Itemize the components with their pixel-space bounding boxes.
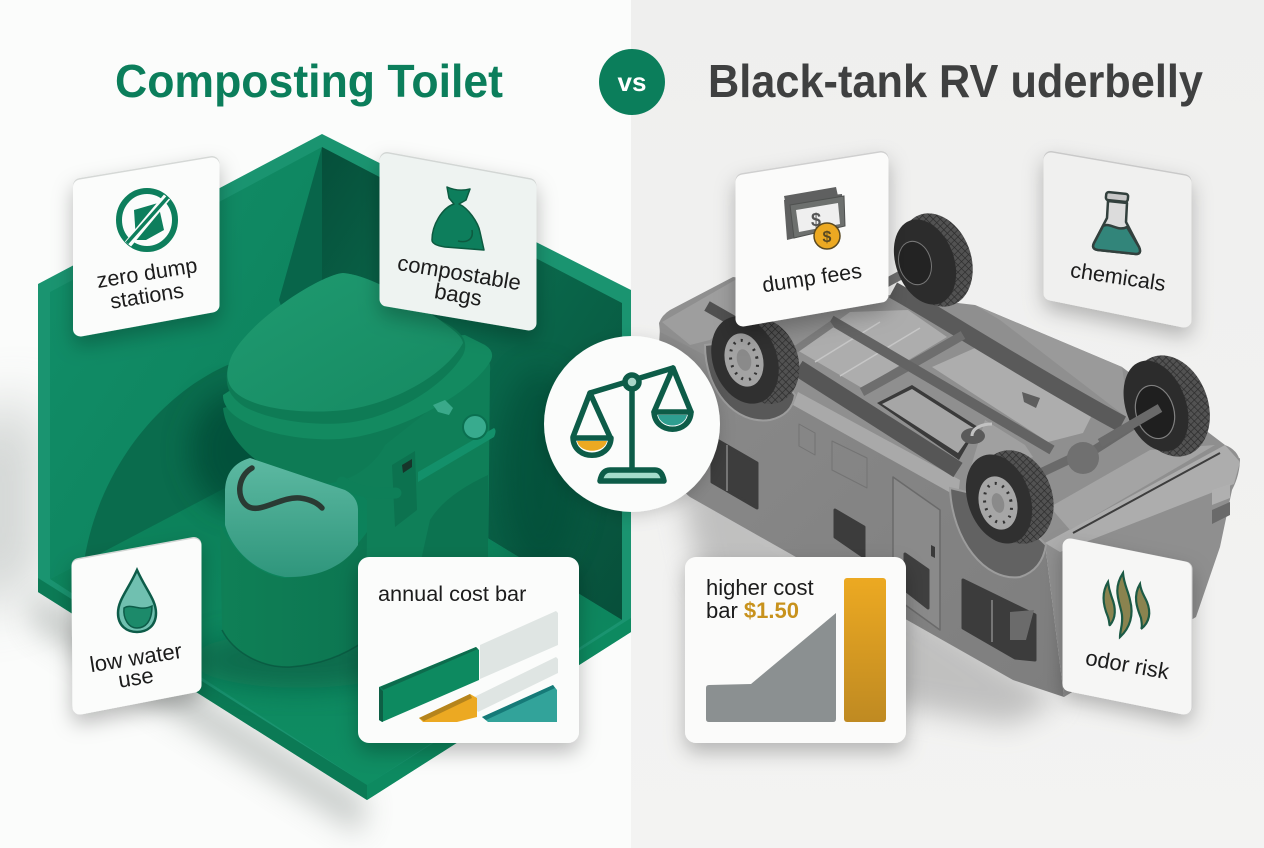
- chassis rails: [707, 262, 1157, 478]
- end wall: [1045, 458, 1240, 697]
- icon: odor waves: [1104, 573, 1149, 637]
- illustration: overturned RV underbelly: [659, 203, 1240, 697]
- icon: balance scale: [573, 368, 691, 481]
- icon: cash and coin: $: [823, 229, 832, 246]
- teal waste bucket: [225, 458, 358, 577]
- label: low water use: use: [116, 662, 155, 693]
- wheel front left: [700, 307, 811, 414]
- label: compostable bags: bags: [433, 278, 484, 311]
- wheel front right: [954, 440, 1066, 554]
- vs badge: vs: [618, 67, 646, 97]
- wheel rear inner: [883, 203, 985, 317]
- label: annual cost bar: annual cost bar: [378, 581, 526, 606]
- label: dump fees: dump fees: [761, 259, 863, 297]
- card: compostable bags: [387, 160, 529, 323]
- wheel arches: [950, 488, 1046, 577]
- toilet lid: [227, 273, 465, 424]
- chart: annual cost isometric bars: [379, 611, 558, 722]
- icon: water drop: [118, 570, 156, 632]
- card: annual cost bar: [358, 557, 579, 743]
- panel: left background: [0, 0, 632, 848]
- label: odor risk: odor risk: [1084, 645, 1172, 684]
- illustration: green composting toilet: [220, 273, 496, 667]
- card: dump fees: [743, 158, 881, 319]
- card: odor risk: [1070, 546, 1185, 707]
- card: zero dump stations: [80, 164, 212, 329]
- icon: cash and coin: [784, 187, 845, 249]
- toilet rim under lid: [223, 335, 492, 439]
- label: zero dump stations: [95, 253, 199, 314]
- title: Composting Toilet: Composting Toilet: [115, 55, 503, 107]
- icon: chemical flask: [1093, 192, 1140, 254]
- card: higher cost bar: [685, 557, 906, 743]
- outer bucket sleeve: [220, 525, 367, 667]
- label: bar price: bar $1.50: [706, 598, 799, 623]
- chart: orange cost bar: [844, 578, 886, 722]
- toilet bowl: [223, 340, 490, 484]
- card: low water use: [79, 544, 194, 707]
- wheel rear right: [1100, 344, 1223, 468]
- illustration: green room corner: [38, 134, 631, 800]
- underbelly: [659, 277, 1240, 543]
- rv shadow: [670, 440, 1060, 725]
- light side trim: [793, 392, 960, 497]
- card: chemicals: [1051, 158, 1184, 320]
- tank panels: [797, 310, 947, 388]
- vs badge: [599, 49, 665, 115]
- icon: cash and coin: $: [811, 210, 821, 230]
- label: zero dump stations: stations: [108, 278, 185, 314]
- label: higher cost bar $1.50: higher cost: [706, 575, 814, 600]
- icon: compostable bag: [432, 187, 484, 250]
- bucket strap: [240, 468, 322, 508]
- label: compostable bags: compostable: [396, 250, 523, 295]
- label: low water use: low water: [88, 638, 184, 677]
- label: zero dump stations: zero dump: [95, 253, 199, 293]
- side wall: [659, 328, 1064, 697]
- shadow behind green room: [0, 400, 367, 835]
- label: chemicals: chemicals: [1069, 257, 1168, 296]
- center scale badge: [544, 336, 720, 512]
- panel: right background: [631, 0, 1264, 848]
- toilet body: [340, 345, 490, 565]
- windows and door: [712, 424, 1230, 660]
- chart: grey cost area: [706, 613, 836, 722]
- title: Black-tank RV uderbelly: Black-tank RV uderbelly: [708, 55, 1203, 107]
- icon: no dump station: [119, 191, 175, 249]
- control knob and latches: [342, 400, 487, 527]
